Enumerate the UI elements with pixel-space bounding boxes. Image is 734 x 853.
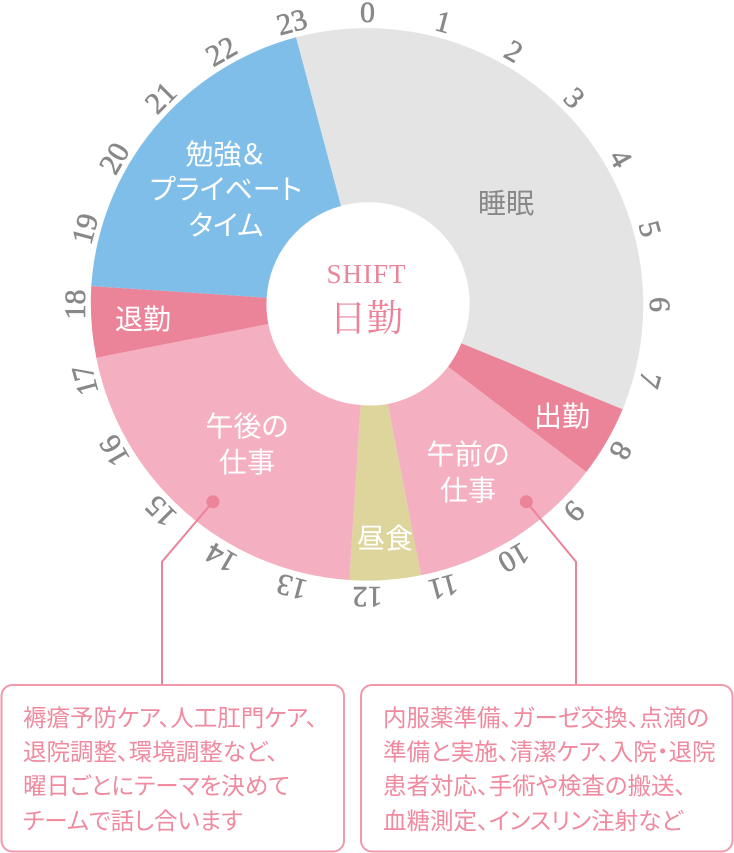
segment: leaving work (91, 286, 268, 358)
hour labels: 3 (557, 81, 591, 115)
label: afternoon work: 午後の (206, 411, 288, 442)
hour labels: 21 (139, 76, 183, 120)
hour labels: 23 (273, 3, 311, 42)
hour labels: 2 (499, 34, 528, 70)
callout: morning work details: 患者対応、手術や検査の搬送、 (383, 773, 686, 799)
hour labels: 4 (602, 144, 638, 173)
label: afternoon work (206, 411, 288, 478)
segment: sleep (296, 28, 643, 409)
hour labels: 9 (557, 494, 591, 528)
label: commute to work: 出勤 (534, 401, 590, 432)
label: study and private time: プライベート (150, 174, 302, 205)
label: sleep: 睡眠 (478, 188, 534, 219)
label: study and private time (150, 139, 302, 241)
hour labels: 8 (602, 436, 638, 465)
leader line: afternoon work (162, 495, 220, 685)
segment: lunch (349, 404, 421, 581)
callout: afternoon work details: 曜日ごとにテーマを決めて (23, 773, 290, 799)
hour labels (59, 0, 676, 613)
hour labels: 10 (492, 536, 535, 579)
callout: morning work details: 内服薬準備、ガーゼ交換、点滴の (383, 705, 709, 731)
label: morning work: 午前の (426, 439, 510, 470)
hour labels: 6 (643, 297, 676, 312)
hour labels: 22 (200, 30, 243, 73)
hour labels: 19 (66, 210, 105, 248)
hour labels: 5 (632, 217, 667, 240)
hour labels: 7 (632, 369, 667, 392)
hour labels: 17 (66, 361, 105, 399)
hour labels: 16 (93, 429, 136, 472)
hour labels: 15 (139, 489, 183, 533)
callout: morning work details (361, 685, 732, 852)
label: leaving work: 退勤 (115, 304, 171, 335)
segment: afternoon work (96, 324, 361, 580)
callout: morning work details: 血糖測定、インスリン注射など (383, 808, 684, 834)
label: lunch: 昼食 (357, 523, 413, 554)
callout: afternoon work details: チームで話し合います (23, 808, 243, 834)
donut chart: daily schedule (91, 28, 643, 581)
center title (326, 259, 407, 340)
hour labels: 14 (200, 536, 243, 579)
center title: 日勤 (330, 298, 404, 340)
label: study and private time: タイム (189, 210, 263, 241)
hour labels: 12 (352, 580, 382, 613)
center title: SHIFT (326, 259, 407, 289)
callout: morning work details: 準備と実施、清潔ケア、入院・退院 (383, 739, 715, 765)
hour labels: 11 (425, 567, 461, 606)
callout: afternoon work details: 退院調整、環境調整など、 (23, 739, 278, 765)
hour labels: 13 (273, 567, 311, 606)
label: afternoon work: 仕事 (219, 447, 275, 478)
segment: morning work (388, 367, 586, 575)
hour labels: 20 (93, 137, 136, 180)
label: morning work: 仕事 (440, 475, 496, 506)
hour labels: 18 (59, 290, 92, 320)
label: morning work (426, 439, 510, 506)
segment: study and private time (91, 37, 341, 298)
leader line: morning work (520, 495, 576, 685)
label: study and private time: 勉強＆ (186, 139, 264, 170)
callout: afternoon work details: 褥瘡予防ケア、人工肛門ケア、 (23, 705, 318, 731)
hour labels: 1 (432, 5, 455, 40)
callout: afternoon work details (2, 685, 344, 852)
segment: commute to work (448, 343, 623, 472)
